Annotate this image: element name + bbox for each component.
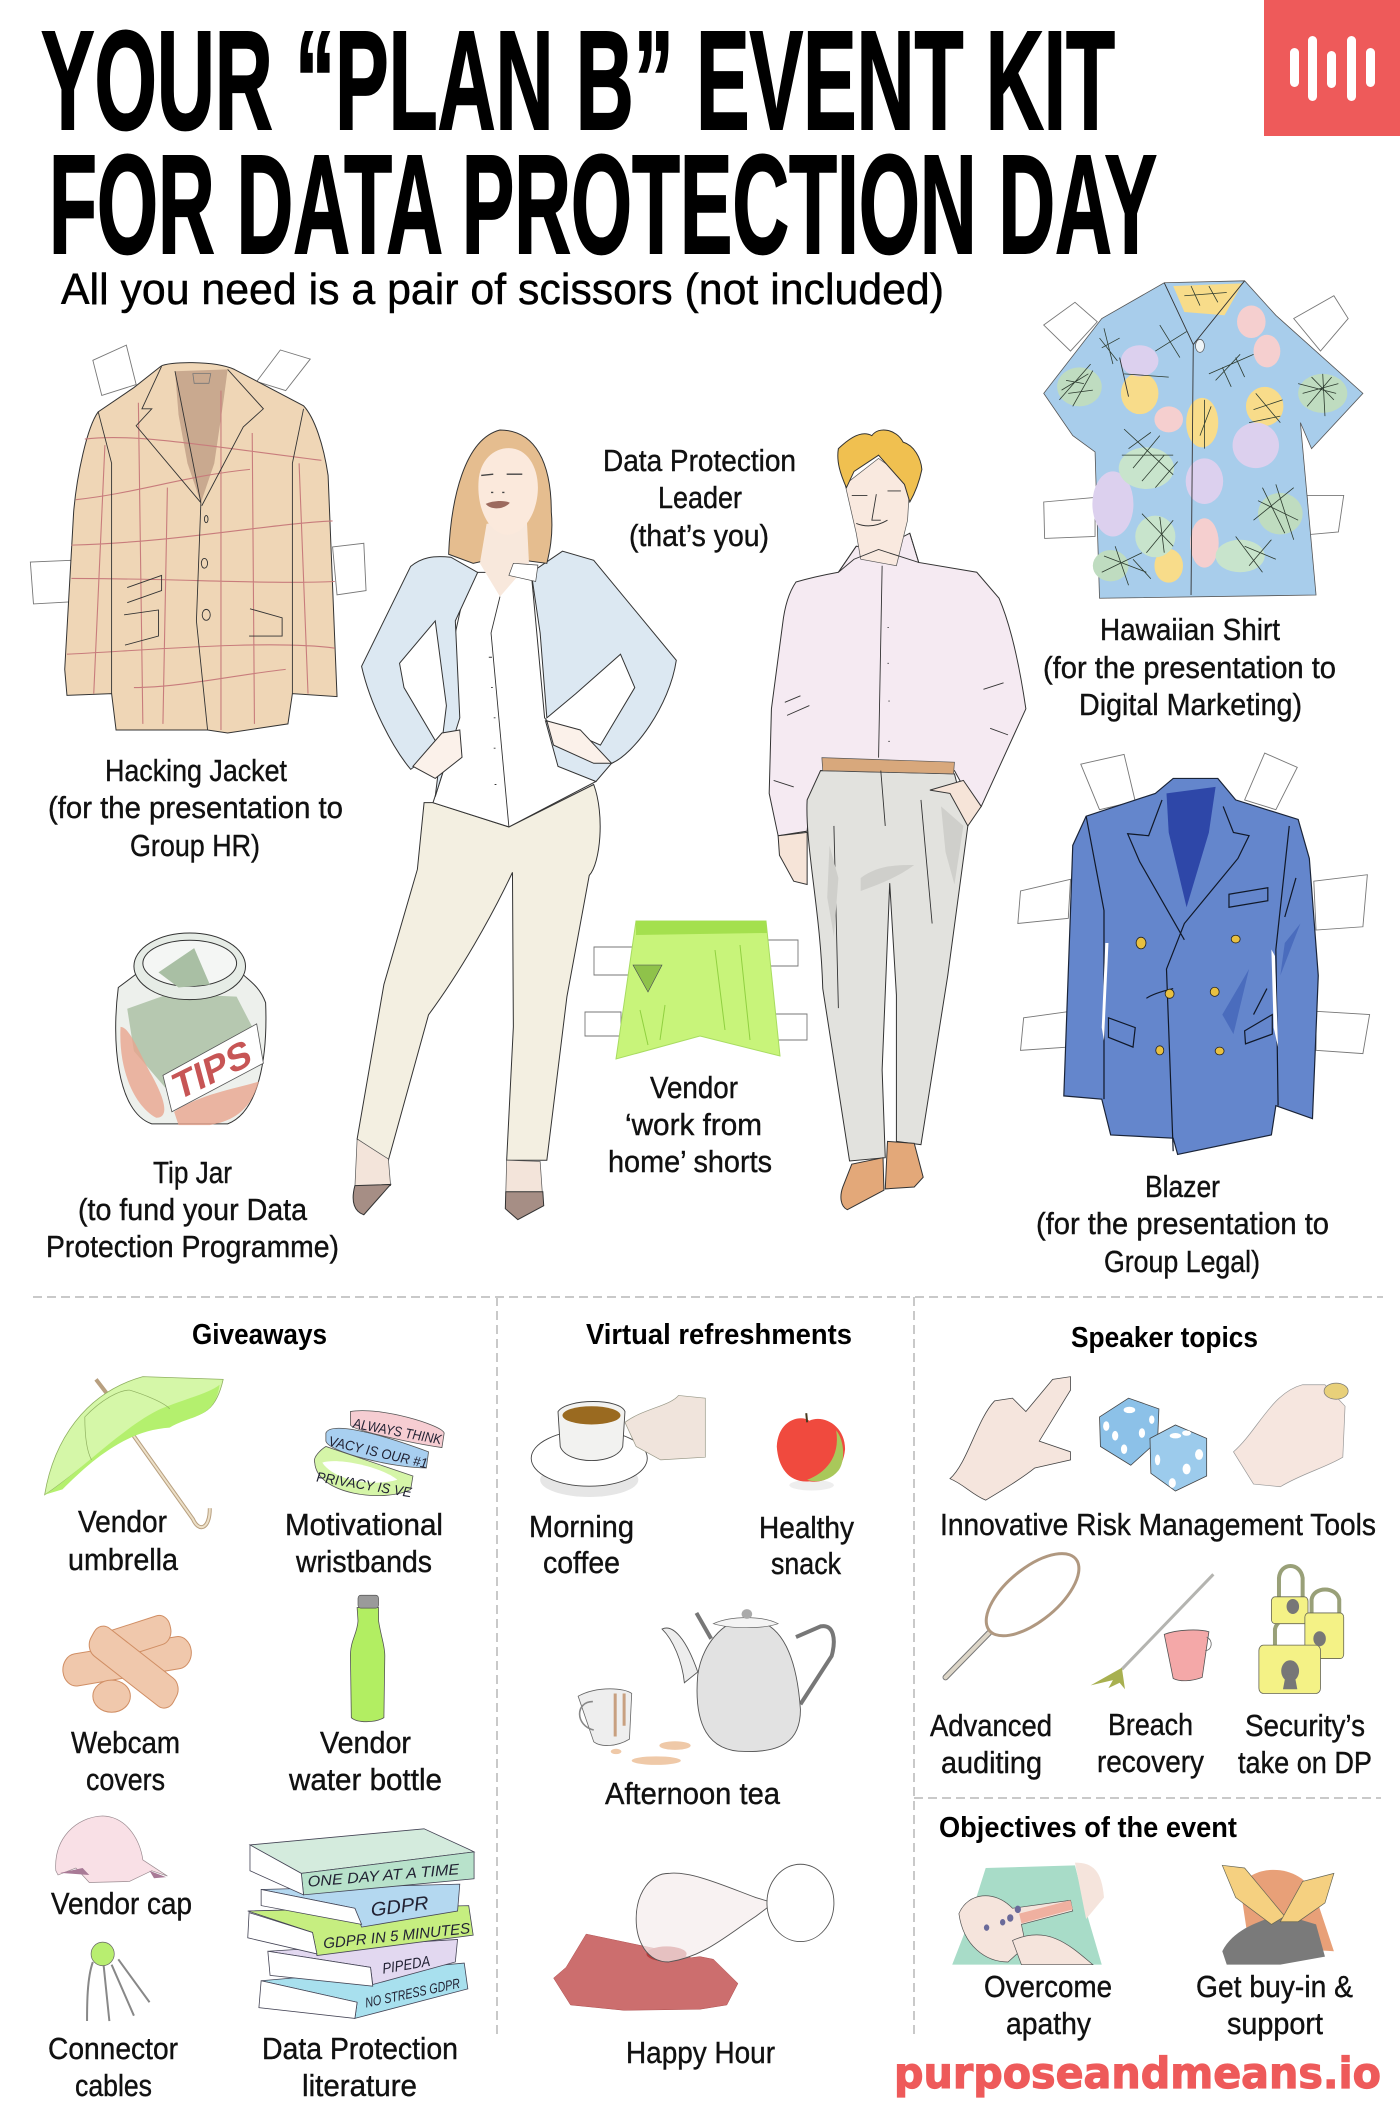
- label: webcam covers: [71, 1725, 180, 1797]
- shirt: [769, 533, 1026, 836]
- label: vendor umbrella: umbrella: [68, 1542, 179, 1577]
- label: data protection literature: [262, 2031, 458, 2103]
- label: security's take on dp: [1238, 1708, 1372, 1780]
- label: vendor shorts: home’ shorts: [608, 1144, 772, 1179]
- illustration: tip jar: [116, 933, 266, 1125]
- illustration: data protection leader (woman): [353, 430, 676, 1220]
- icon: broom and bucket: [1091, 1574, 1213, 1689]
- label: overcome apathy: apathy: [1006, 2006, 1091, 2041]
- icon: data protection literature: GDPR: [370, 1892, 430, 1921]
- label: hawaiian shirt: Digital Marketing): [1079, 687, 1302, 722]
- icon: motivational wristbands: [314, 1411, 444, 1501]
- icon: data protection literature: ONE DAY AT A TIME: [307, 1860, 461, 1890]
- label: blazer: Group Legal): [1104, 1244, 1260, 1279]
- hair: [838, 430, 922, 502]
- trousers: [357, 784, 600, 1160]
- label: motivational wristbands: [285, 1507, 443, 1579]
- icon: data protection literature: GDPR IN 5 MINUTES: [323, 1919, 471, 1952]
- label: tip jar: Protection Programme): [46, 1229, 339, 1264]
- icon: vendor water bottle: [350, 1595, 385, 1722]
- label: breach recovery: recovery: [1097, 1744, 1204, 1779]
- panel: speaker topics: [930, 1322, 1376, 1780]
- label: vendor shorts: ‘work from: [625, 1107, 762, 1142]
- label: vendor umbrella: [68, 1504, 179, 1577]
- illustration: man: [769, 430, 1026, 1210]
- label: motivational wristbands: Motivational: [285, 1507, 443, 1542]
- trousers: [807, 771, 968, 1161]
- icon: vendor cap: [56, 1816, 167, 1883]
- label: tip jar: (to fund your Data: [78, 1192, 308, 1227]
- icon: healthy snack: [777, 1413, 845, 1491]
- icon: coin flip hand: [1233, 1383, 1348, 1487]
- label: advanced auditing: auditing: [941, 1745, 1042, 1780]
- icon: happy hour: [554, 1864, 834, 2010]
- label: vendor water bottle: Vendor: [320, 1725, 411, 1760]
- label: afternoon tea: Afternoon tea: [605, 1776, 781, 1811]
- feet: [355, 1139, 542, 1194]
- hair: [449, 430, 552, 563]
- face: [845, 458, 910, 566]
- illustration: hacking jacket: [30, 345, 366, 733]
- label: hawaiian shirt: [1043, 612, 1336, 722]
- icon: padlocks: [1259, 1566, 1344, 1693]
- icon: data protection literature: PIPEDA: [381, 1952, 431, 1977]
- icon: connector cables: [87, 1942, 150, 2021]
- icon: data protection literature: NO STRESS GDPR: [364, 1975, 461, 2011]
- label: vendor shorts: [608, 1070, 772, 1179]
- panel: giveaways: [45, 1319, 474, 2103]
- label: breach recovery: Breach: [1108, 1707, 1193, 1742]
- label: healthy snack: [759, 1510, 854, 1581]
- blazer: [362, 557, 478, 797]
- label: blazer: [1036, 1169, 1329, 1279]
- panel: objectives of the event: [939, 1812, 1353, 2041]
- label: breach recovery: [1097, 1707, 1204, 1779]
- label: connector cables: [48, 2031, 178, 2103]
- illustration: hawaiian shirt: [1044, 281, 1363, 598]
- label: overcome apathy: [984, 1969, 1112, 2041]
- label: hacking jacket: (for the presentation to: [48, 790, 343, 825]
- icon: hand mirror: [946, 1537, 1090, 1677]
- label: motivational wristbands: wristbands: [295, 1544, 432, 1579]
- illustration: tip jar: TIPS: [169, 1031, 255, 1109]
- label: tip jar: [46, 1155, 339, 1264]
- heading: giveaways: Giveaways: [192, 1319, 327, 1351]
- label: morning coffee: coffee: [543, 1545, 620, 1580]
- icon: vendor umbrella: [45, 1377, 223, 1527]
- label: vendor water bottle: [288, 1725, 442, 1797]
- shoes: [353, 1184, 544, 1220]
- hands: [413, 721, 612, 778]
- teacup and spills: [578, 1689, 632, 1746]
- label: webcam covers: covers: [86, 1762, 165, 1797]
- label: morning coffee: [529, 1509, 634, 1580]
- icon: nail filing: [952, 1863, 1104, 1965]
- icon: crossed fingers: [950, 1377, 1071, 1500]
- panel: virtual refreshments: [529, 1319, 854, 2070]
- label: security's take on dp: Security’s: [1245, 1708, 1365, 1743]
- icon: afternoon tea: [578, 1609, 834, 1765]
- label: connector cables: cables: [75, 2068, 152, 2103]
- icon: morning coffee: [531, 1395, 705, 1497]
- icon: motivational wristbands: PRIVACY IS VE: [316, 1468, 413, 1501]
- label: advanced auditing: Advanced: [930, 1708, 1052, 1743]
- label: healthy snack: snack: [771, 1546, 841, 1581]
- label: advanced auditing: [930, 1708, 1052, 1780]
- label: get buy-in and support: [1196, 1969, 1353, 2041]
- icon: logo: [1264, 0, 1400, 136]
- label: data protection literature: Data Protection: [262, 2031, 458, 2066]
- label: hacking jacket: Hacking Jacket: [105, 753, 287, 788]
- label: tip jar: Tip Jar: [153, 1155, 232, 1190]
- label: get buy-in and support: support: [1227, 2006, 1323, 2041]
- label: data protection leader: Leader: [658, 480, 742, 515]
- label: connector cables: Connector: [48, 2031, 178, 2066]
- label: hacking jacket: Group HR): [130, 828, 260, 863]
- shoes: [841, 1141, 923, 1210]
- title: [41, 1, 1157, 283]
- heading: objectives of the event: Objectives of the event: [939, 1812, 1237, 1844]
- label: blazer: Blazer: [1145, 1169, 1220, 1204]
- label: hawaiian shirt: Hawaiian Shirt: [1100, 612, 1280, 647]
- brand url: purposeandmeans.io: [894, 2049, 1381, 2099]
- shirt: [433, 572, 596, 827]
- label: data protection leader: [603, 443, 796, 553]
- icon: data protection literature: [248, 1829, 474, 2018]
- label: hacking jacket: [48, 753, 343, 863]
- label: data protection literature: literature: [302, 2068, 417, 2103]
- label: hawaiian shirt: (for the presentation to: [1043, 650, 1336, 685]
- belt: [822, 758, 954, 774]
- label: blazer: (for the presentation to: [1036, 1206, 1329, 1241]
- icon: webcam covers: [61, 1612, 193, 1713]
- label: vendor umbrella: Vendor: [78, 1504, 167, 1539]
- label: overcome apathy: Overcome: [984, 1969, 1112, 2004]
- label: happy hour: Happy Hour: [626, 2035, 775, 2070]
- label: vendor water bottle: water bottle: [288, 1762, 442, 1797]
- icon: motivational wristbands: ALWAYS THINK: [351, 1415, 444, 1448]
- label: get buy-in and support: Get buy-in &: [1196, 1969, 1353, 2004]
- neck and face: [480, 518, 529, 597]
- label: data protection leader: Data Protection: [603, 443, 796, 478]
- subtitle: All you need is a pair of scissors (not included): [61, 265, 944, 314]
- label: morning coffee: Morning: [529, 1509, 634, 1544]
- label: security's take on dp: take on DP: [1238, 1745, 1372, 1780]
- icon: motivational wristbands: VACY IS OUR #1: [328, 1433, 429, 1472]
- heading: speaker topics: Speaker topics: [1071, 1322, 1258, 1354]
- label: vendor cap: Vendor cap: [51, 1886, 192, 1921]
- icon: crossed arms: [1222, 1865, 1334, 1965]
- label: webcam covers: Webcam: [71, 1725, 180, 1760]
- label: data protection leader: (that’s you): [629, 518, 769, 553]
- label: vendor shorts: Vendor: [650, 1070, 738, 1105]
- illustration: shorts: [585, 921, 807, 1059]
- heading: virtual refreshments: Virtual refreshments: [586, 1319, 852, 1351]
- label: healthy snack: Healthy: [759, 1510, 854, 1545]
- illustration: blazer: [1018, 753, 1370, 1154]
- hands: [778, 780, 981, 884]
- icon: dice: [1100, 1398, 1207, 1491]
